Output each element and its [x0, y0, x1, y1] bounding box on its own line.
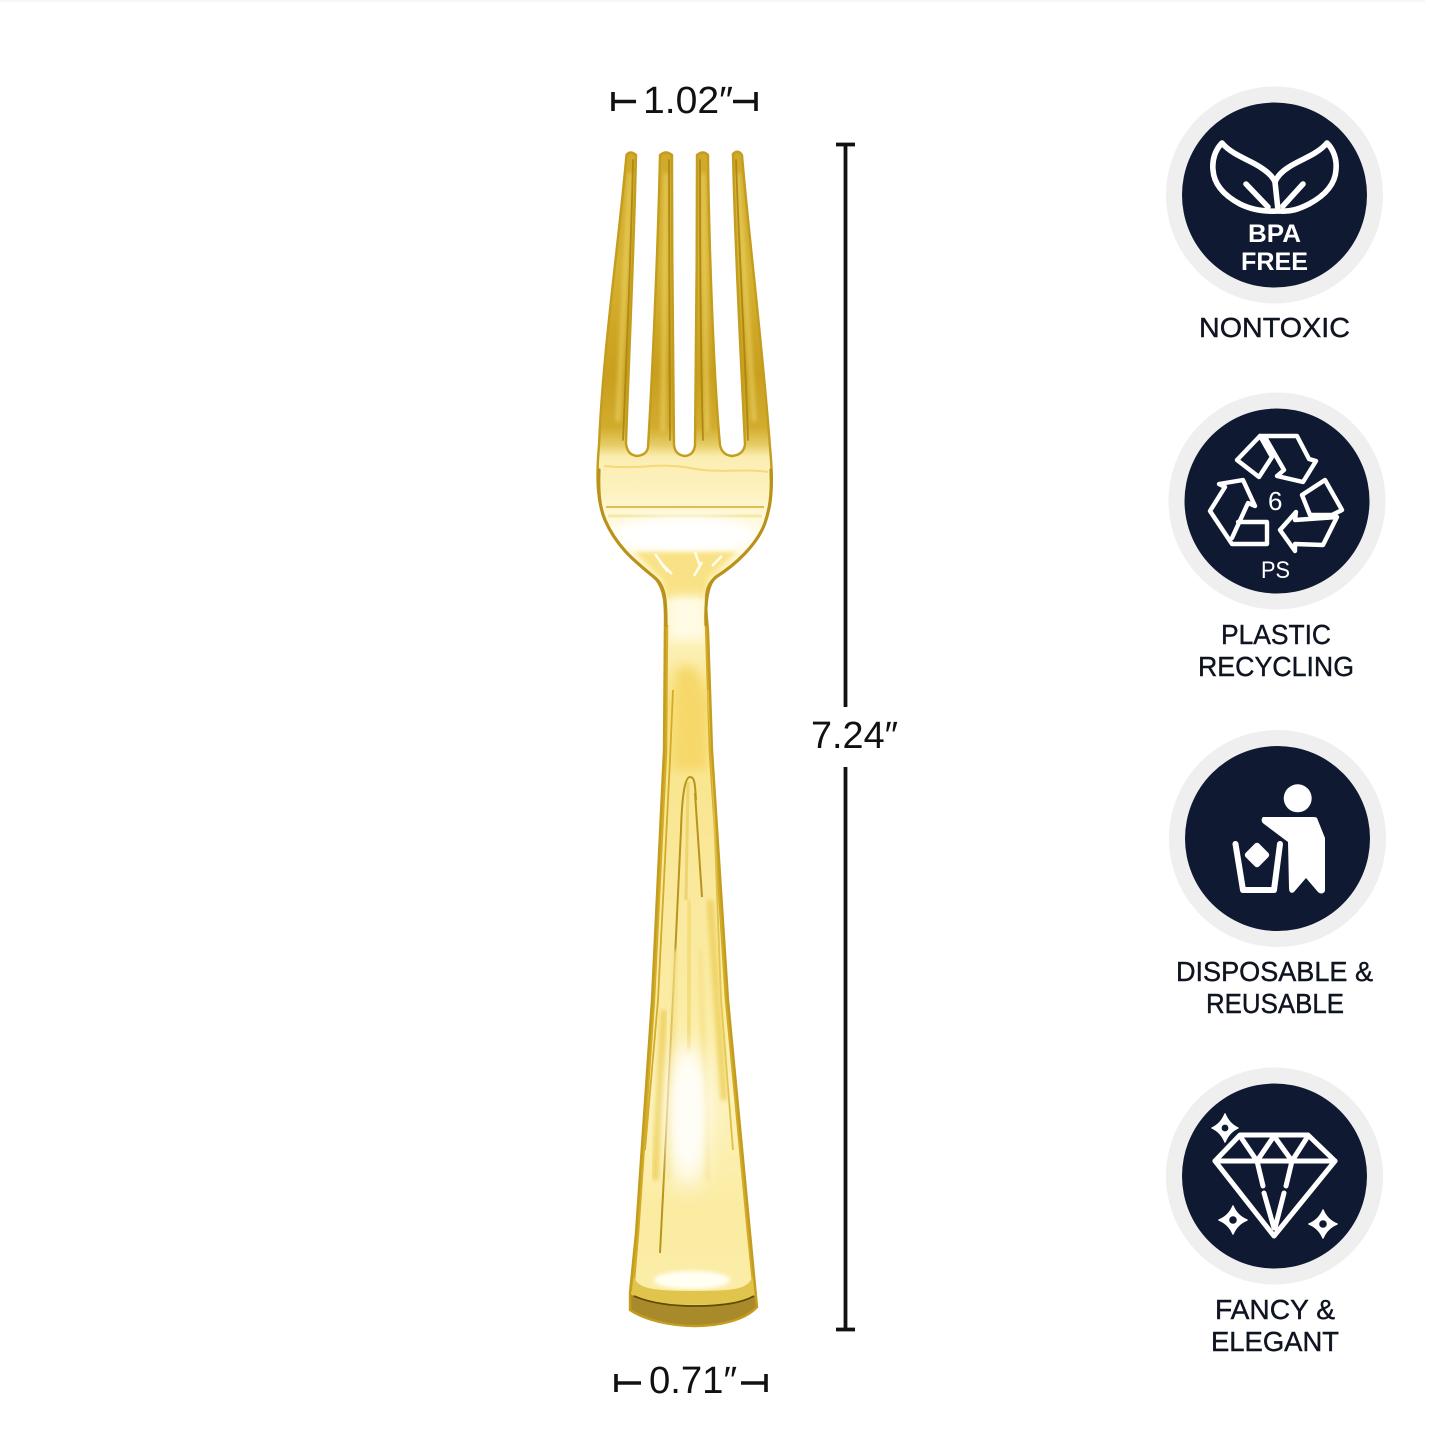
badge: fancy and elegant: [1166, 1068, 1383, 1284]
dimension: handle width 0.71 in: [616, 1360, 766, 1402]
label: plastic recycling: [1198, 619, 1354, 682]
tine shading: [618, 160, 754, 440]
fork outline: [597, 152, 772, 1326]
label: disposable and reusable: [1176, 956, 1373, 1019]
handle lines: [672, 666, 706, 770]
dimension: fork length 7.24 in: 7.24″: [811, 715, 898, 757]
label: nontoxic: NONTOXIC: [1199, 312, 1350, 343]
butt end of the handle: [630, 1276, 758, 1304]
badge: nontoxic BPA free: FREE: [1241, 248, 1308, 276]
badge: plastic recycling: [1168, 392, 1386, 610]
icon: person binning trash: [1236, 784, 1325, 893]
dimension: head width 1.02 in: 1.02″: [643, 80, 733, 122]
icon text: 6: 6: [1268, 486, 1282, 516]
label: disposable and reusable: DISPOSABLE &: [1176, 956, 1373, 987]
icon text: PS: PS: [1261, 557, 1290, 584]
label: plastic recycling: PLASTIC: [1221, 619, 1331, 650]
icon text: BPA FREE: BPA: [1248, 220, 1301, 248]
label: fancy and elegant: FANCY &: [1215, 1294, 1335, 1325]
top edge band: [0, 0, 1425, 2]
palm of the head: [604, 466, 768, 472]
label: disposable and reusable: REUSABLE: [1206, 988, 1344, 1019]
label: fancy and elegant: [1211, 1294, 1339, 1357]
icon: recycling arrows: [1210, 436, 1342, 551]
handle glare: [669, 1043, 707, 1187]
icon: leaves: [1213, 143, 1336, 211]
icon: diamond with sparkles: [1212, 1114, 1337, 1238]
label: fancy and elegant: ELEGANT: [1211, 1326, 1339, 1357]
dimension: handle width 0.71 in: 0.71″: [649, 1360, 737, 1402]
dimension: head width 1.02 in: [613, 80, 756, 122]
gold fork: [590, 145, 780, 1335]
badge: disposable and reusable: [1169, 730, 1386, 947]
dimension: fork length 7.24 in: [811, 143, 898, 1330]
badge: nontoxic BPA free: [1166, 86, 1383, 304]
label: plastic recycling: RECYCLING: [1198, 651, 1354, 682]
